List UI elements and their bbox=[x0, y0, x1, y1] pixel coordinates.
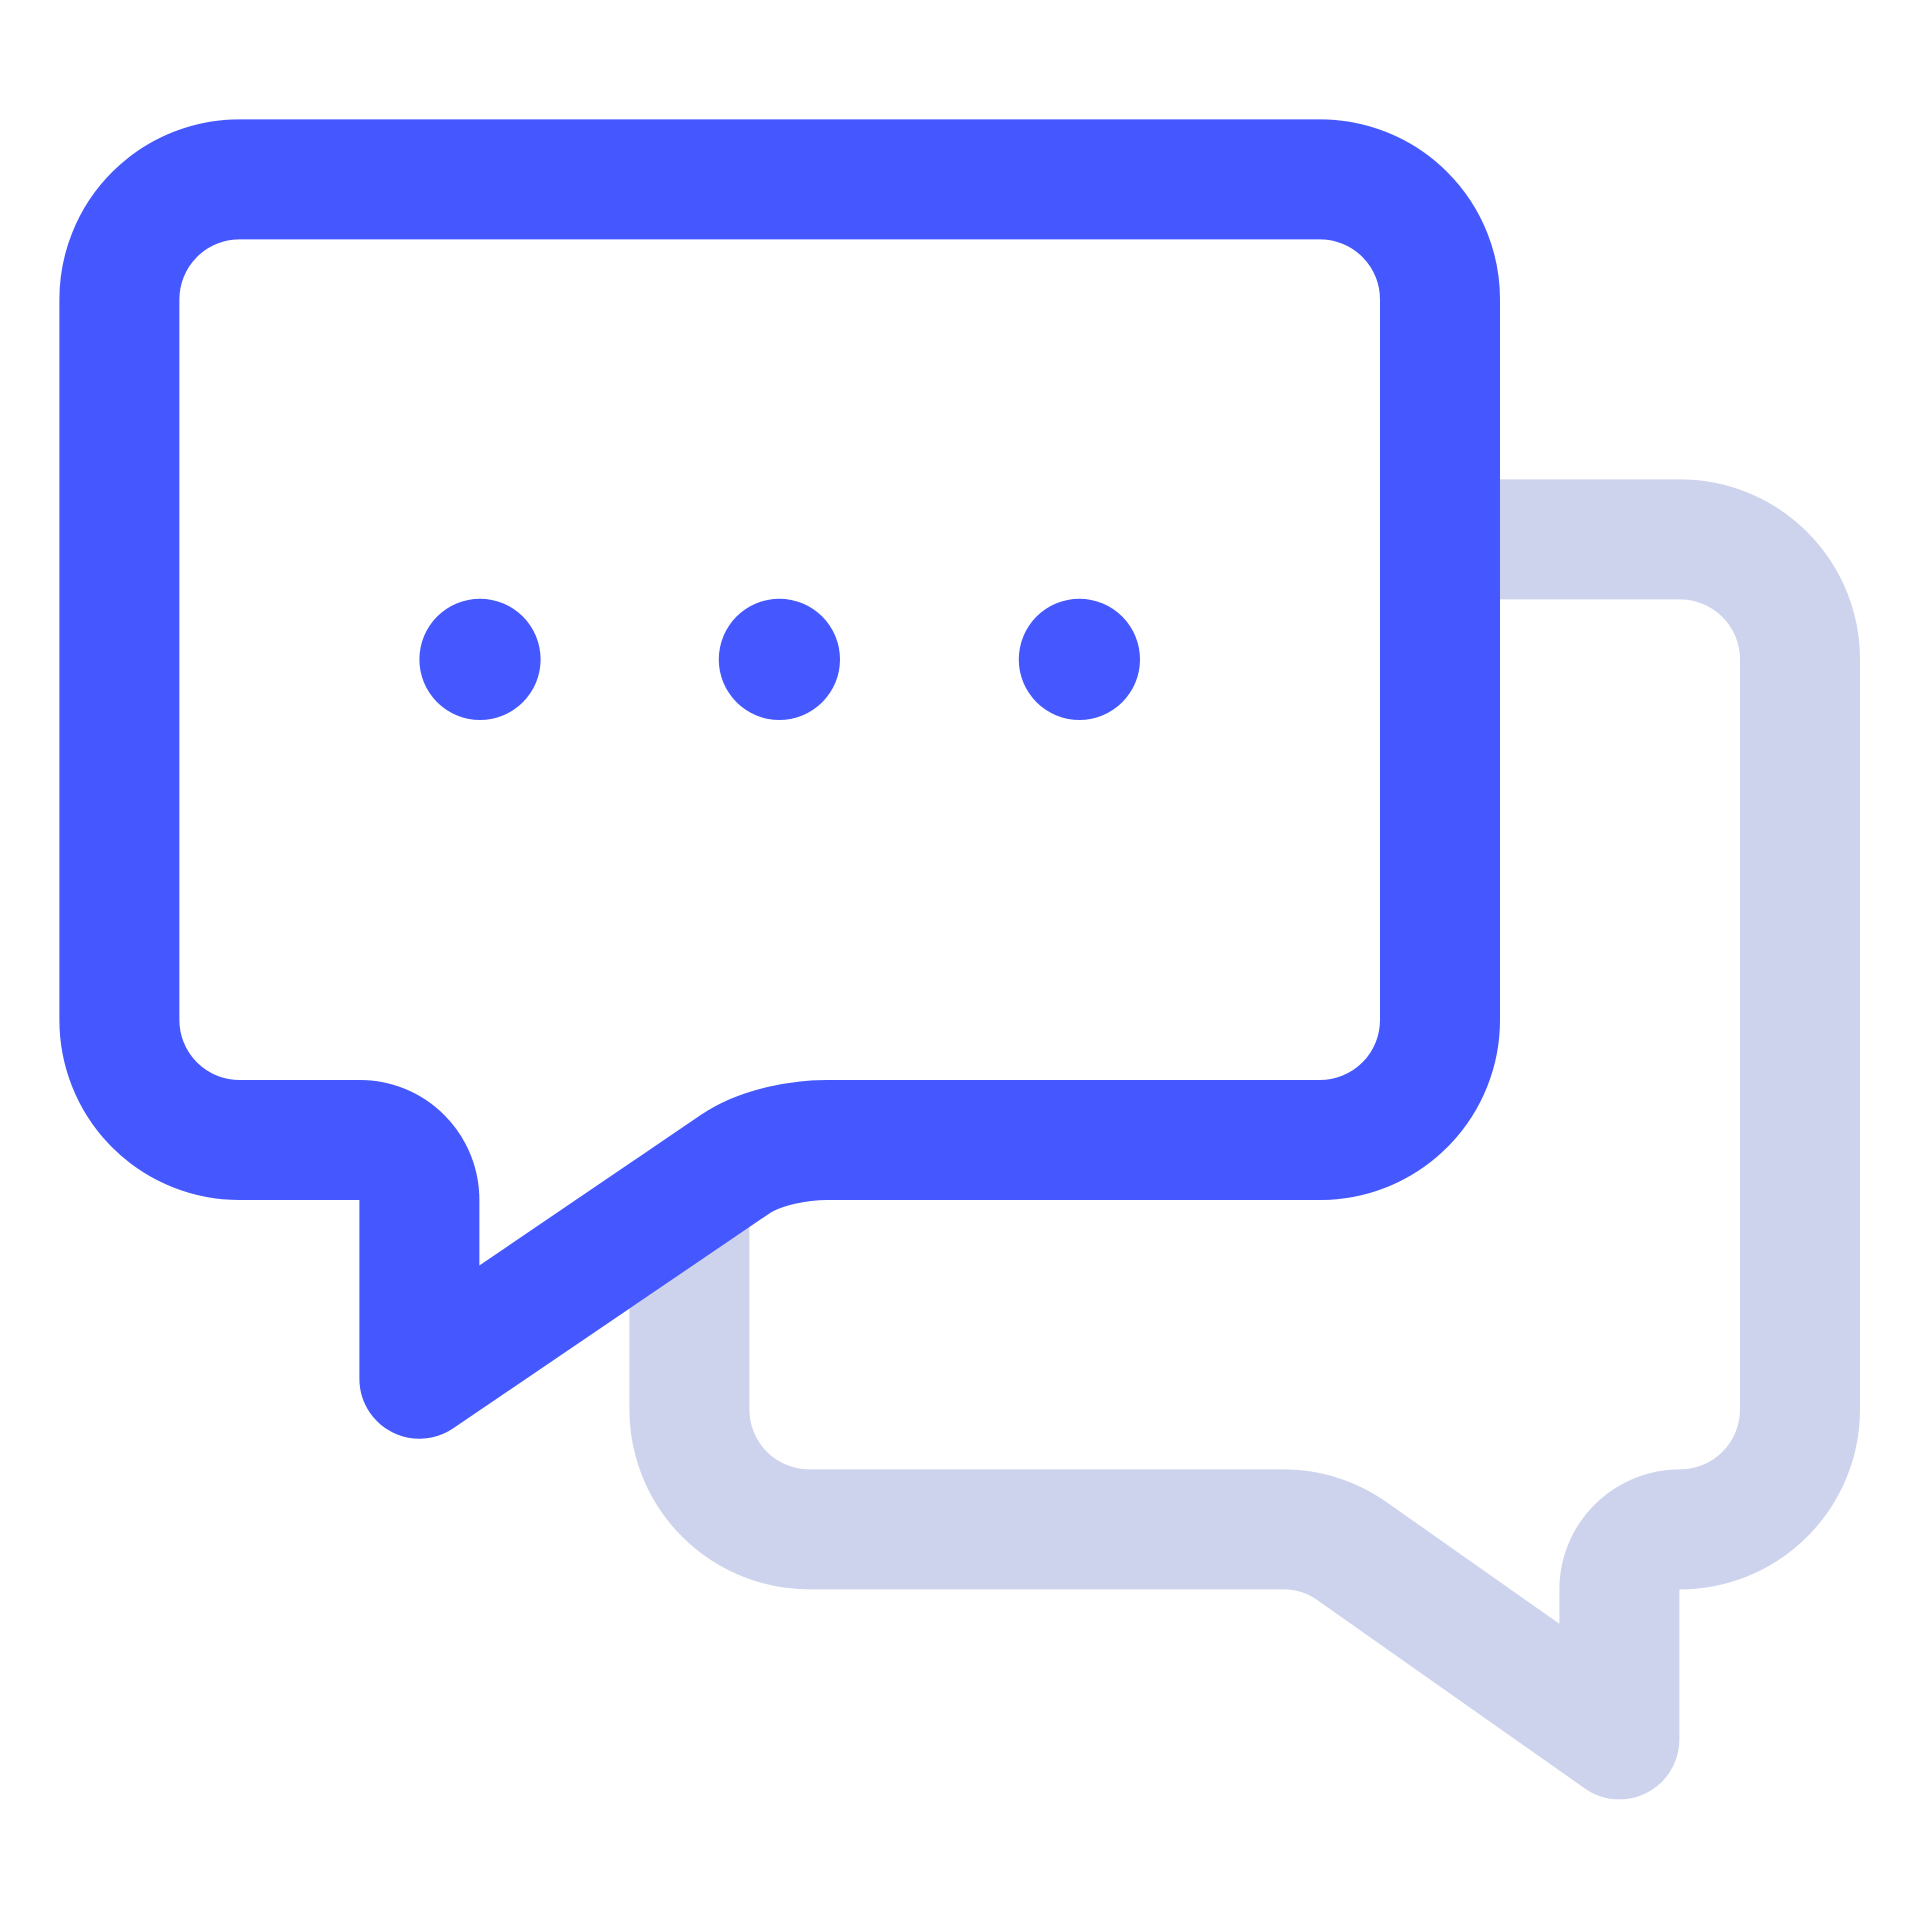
icon: typing dots bbox=[419, 599, 1140, 720]
icon: front speech bubble bbox=[119, 179, 1440, 1379]
icon: back speech bubble bbox=[689, 539, 1800, 1739]
